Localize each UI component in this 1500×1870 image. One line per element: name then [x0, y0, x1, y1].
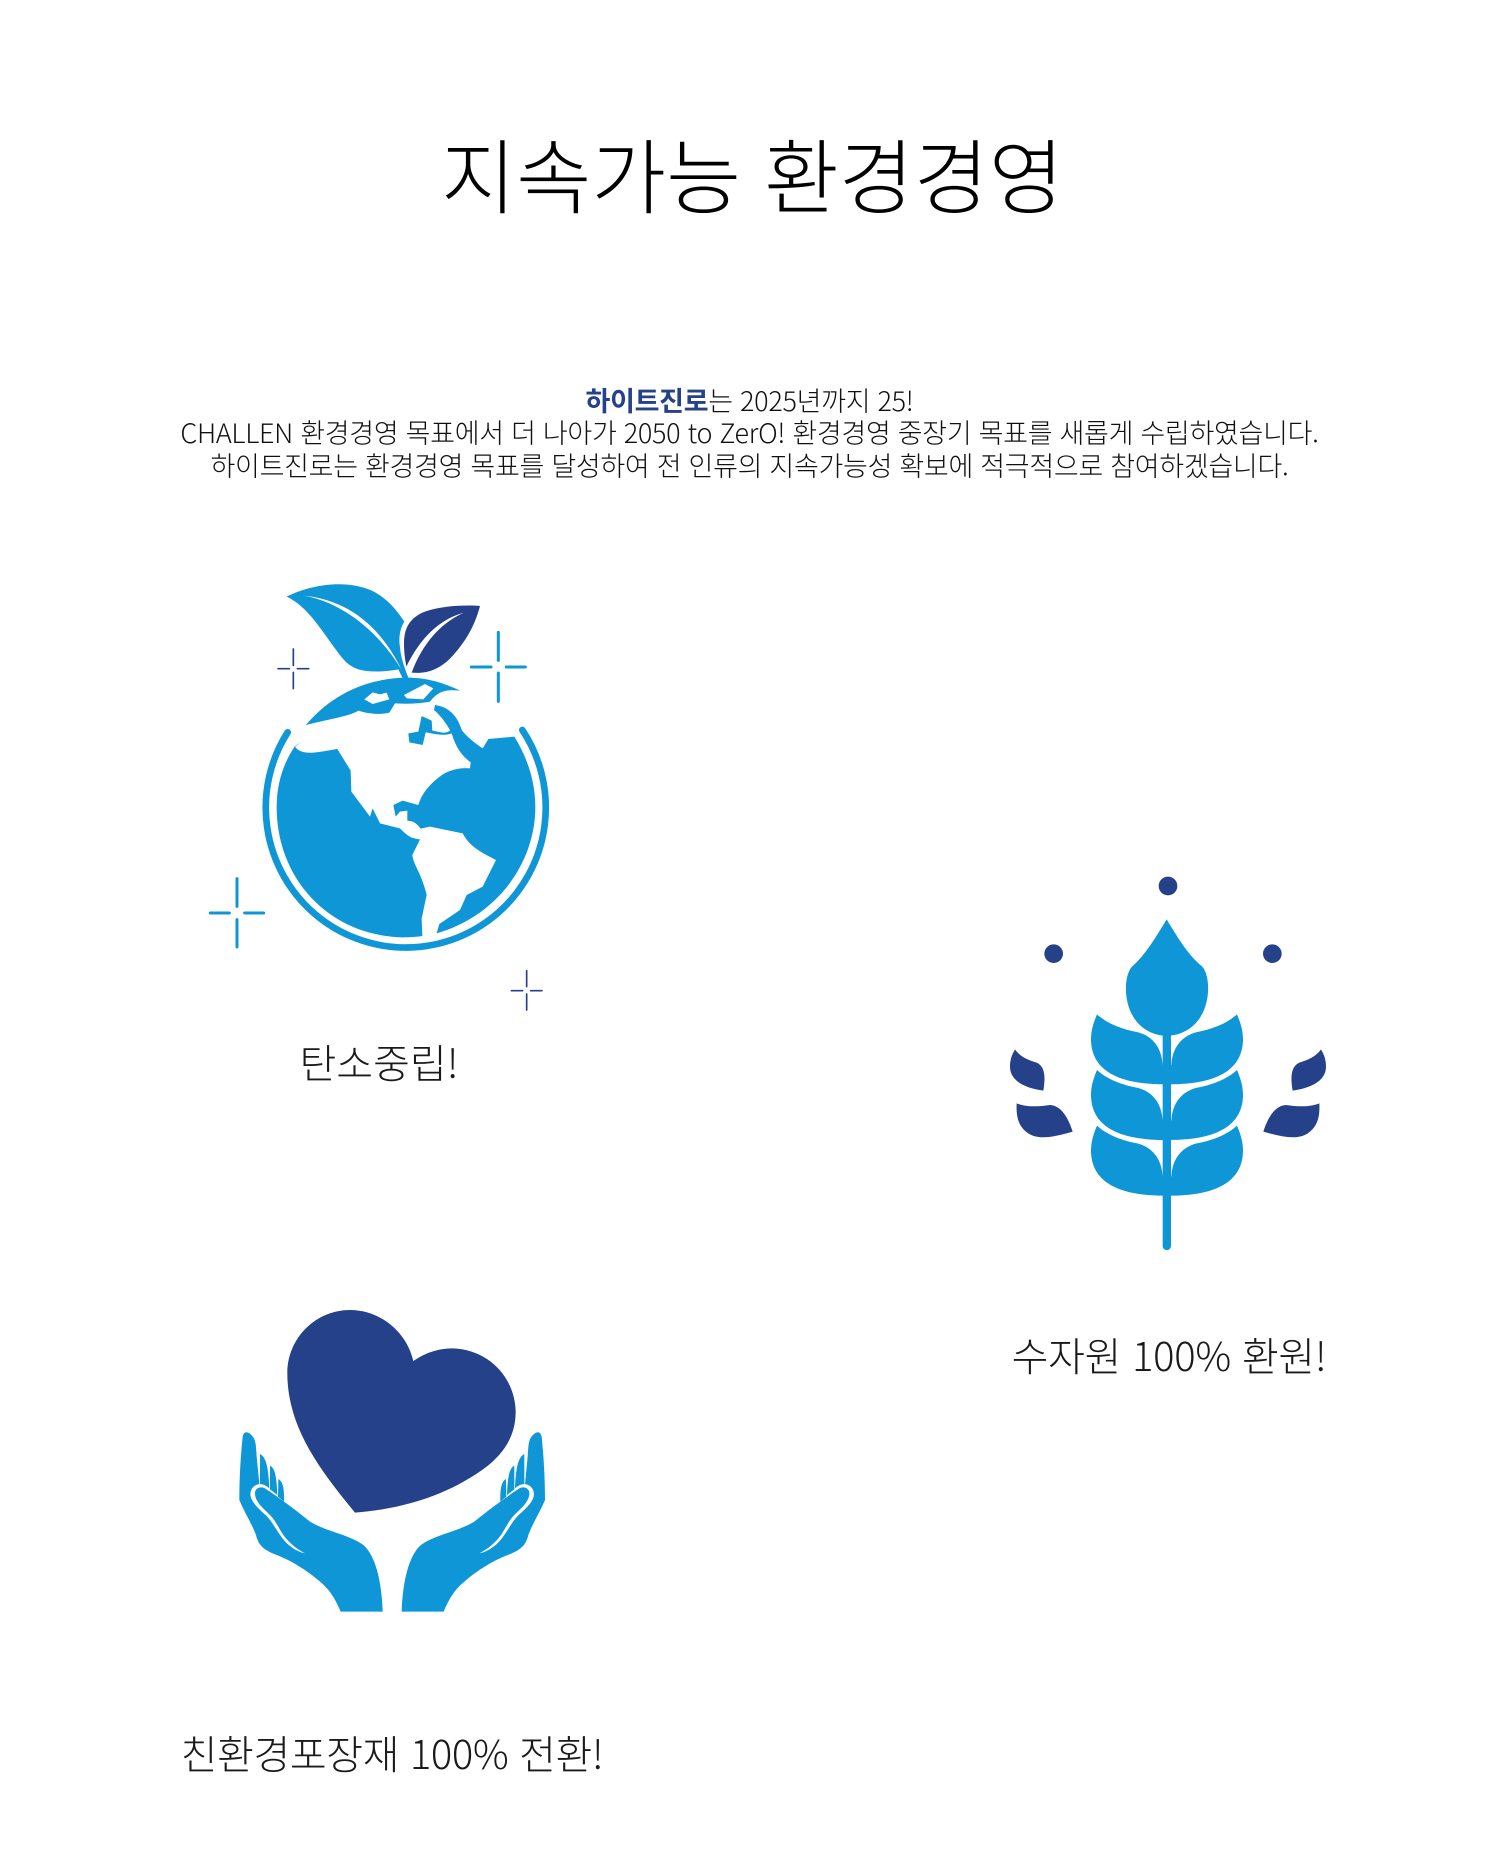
globe ring: [266, 730, 546, 948]
intro text block: CHALLEN 환경경영 목표에서 더 나아가 2050 to ZerO! 환경경영 중장기 목표를 새롭게 수립하였습니다.: [180, 412, 1319, 451]
label: water resources: 수자원 100% 환원!: [1012, 1325, 1326, 1383]
light blue leaf: [287, 584, 409, 678]
dots: [1044, 877, 1282, 963]
left hand: [239, 1432, 383, 1612]
label: eco packaging: 친환경포장재 100% 전환!: [181, 1723, 603, 1781]
right hand: [402, 1432, 545, 1612]
intro text block: 하이트진로는 환경경영 목표를 달성하여 전 인류의 지속가능성 확보에 적극적으로 참여하겠습니다.: [211, 445, 1288, 484]
title: 지속가능 환경경영: [441, 113, 1064, 231]
heart: [287, 1310, 516, 1513]
wheat stalk and grains: [1091, 919, 1243, 1250]
hudson bay: [408, 716, 452, 745]
side leaves: [1010, 1049, 1326, 1137]
arctic land band: [306, 678, 460, 725]
icon: heart in hands: [239, 1310, 545, 1612]
ocean west: [277, 742, 427, 937]
icon: wheat: [1010, 877, 1326, 1250]
intro text block: [180, 380, 1319, 484]
icon: earth with leaves: [210, 584, 546, 1010]
ocean east: [393, 705, 535, 933]
navy leaf: [404, 606, 480, 673]
sparkles: [210, 632, 525, 947]
intro text block: 하이트진로는 2025년까지 25!: [586, 380, 913, 419]
label: carbon neutral: 탄소중립!: [300, 1032, 458, 1090]
